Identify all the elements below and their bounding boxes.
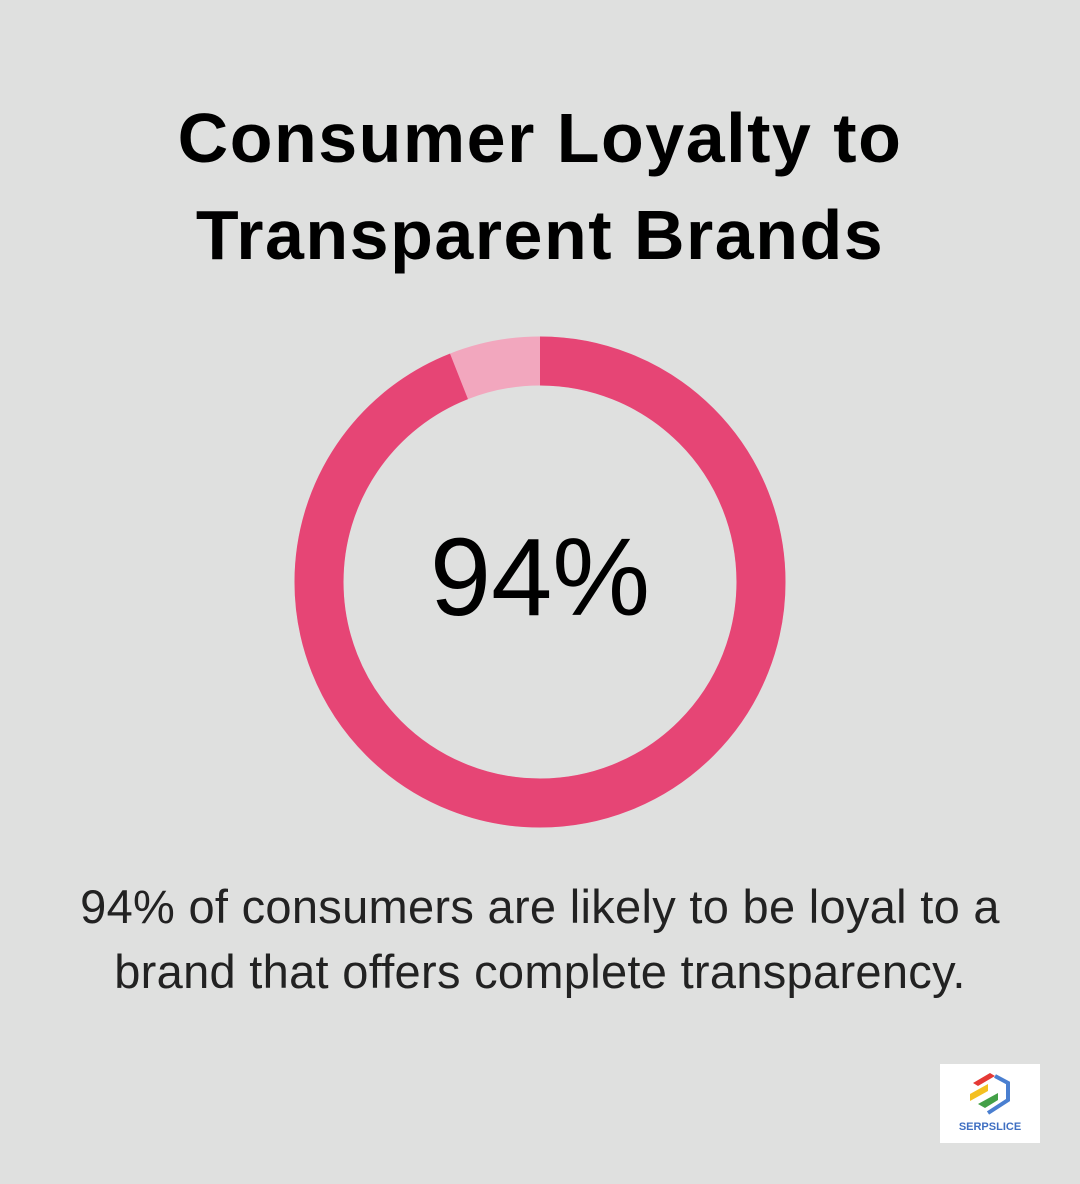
description: 94% of consumers are likely to be loyal to a (80, 880, 1000, 933)
title: Transparent Brands (196, 196, 884, 274)
description (80, 880, 1000, 998)
logo (940, 1064, 1040, 1143)
title: Consumer Loyalty to (178, 99, 902, 177)
description: brand that offers complete transparency. (114, 945, 966, 998)
title (178, 99, 902, 274)
donut chart: 94% (430, 516, 650, 639)
logo: SERPSLICE (959, 1121, 1021, 1133)
